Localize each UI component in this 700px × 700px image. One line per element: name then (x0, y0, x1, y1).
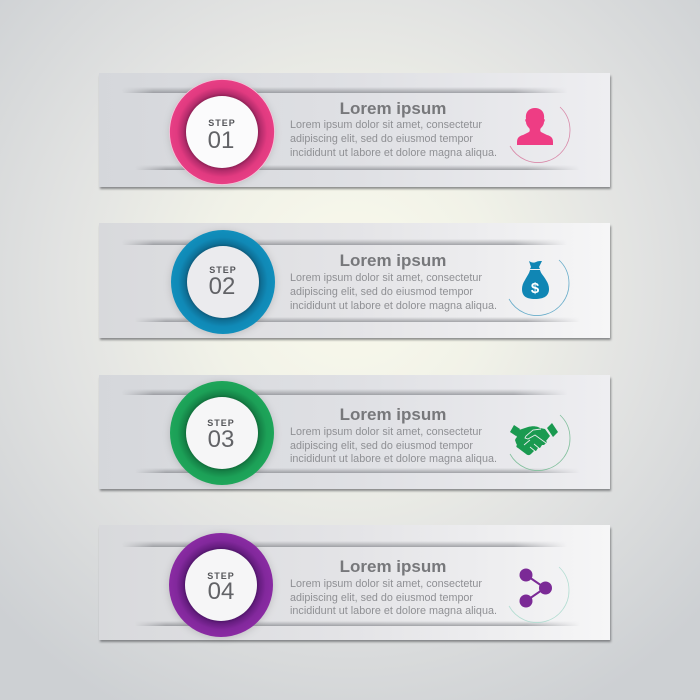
step badge 1 (170, 80, 274, 185)
text block 4: Lorem ipsum dolor sit amet, consectetur (290, 578, 482, 590)
panel: step 3 (99, 375, 611, 491)
text block 3: adipiscing elit, sed do eiusmod tempor (290, 440, 473, 452)
heading 4: Lorem ipsum (340, 557, 446, 576)
icon: money bag: $ (531, 280, 540, 297)
step badge 1: STEP (208, 118, 236, 128)
step badge 3 (170, 381, 274, 486)
step badge 2: 02 (209, 273, 235, 300)
heading 2: Lorem ipsum (340, 251, 446, 270)
heading 3: Lorem ipsum (340, 405, 446, 424)
step badge 1: 01 (208, 127, 234, 154)
icon: handshake (510, 415, 570, 471)
text block 3: incididunt ut labore et dolore magna aliqua. (290, 453, 497, 465)
text block 3: Lorem ipsum dolor sit amet, consectetur (290, 426, 482, 438)
text block 1: Lorem ipsum dolor sit amet, consectetur (290, 119, 482, 131)
text block 1: incididunt ut labore et dolore magna aliqua. (290, 147, 497, 159)
text block 2: adipiscing elit, sed do eiusmod tempor (290, 286, 473, 298)
text block 2: Lorem ipsum dolor sit amet, consectetur (290, 272, 482, 284)
step badge 4: STEP (207, 571, 235, 581)
step badge 2 (171, 230, 275, 335)
panel: step 1 (99, 73, 611, 189)
text block 2: incididunt ut labore et dolore magna aliqua. (290, 300, 497, 312)
text block 4: adipiscing elit, sed do eiusmod tempor (290, 592, 473, 604)
step badge 2: STEP (209, 265, 237, 275)
panel: step 4 (99, 525, 611, 642)
heading 1: Lorem ipsum (340, 99, 446, 118)
panel: step 2 (99, 223, 611, 340)
step badge 4: 04 (208, 578, 234, 605)
icon: share nodes (509, 567, 569, 623)
text block 3 (290, 426, 497, 465)
text block 1: adipiscing elit, sed do eiusmod tempor (290, 133, 473, 145)
text block 4 (290, 578, 497, 617)
step badge 3: 03 (208, 426, 234, 453)
text block 2 (290, 272, 497, 312)
icon: person (510, 107, 570, 163)
icon: money bag (509, 260, 569, 316)
step badge 4 (169, 533, 273, 638)
text block 1 (290, 119, 497, 159)
step badge 3: STEP (207, 418, 235, 428)
text block 4: incididunt ut labore et dolore magna aliqua. (290, 605, 497, 617)
